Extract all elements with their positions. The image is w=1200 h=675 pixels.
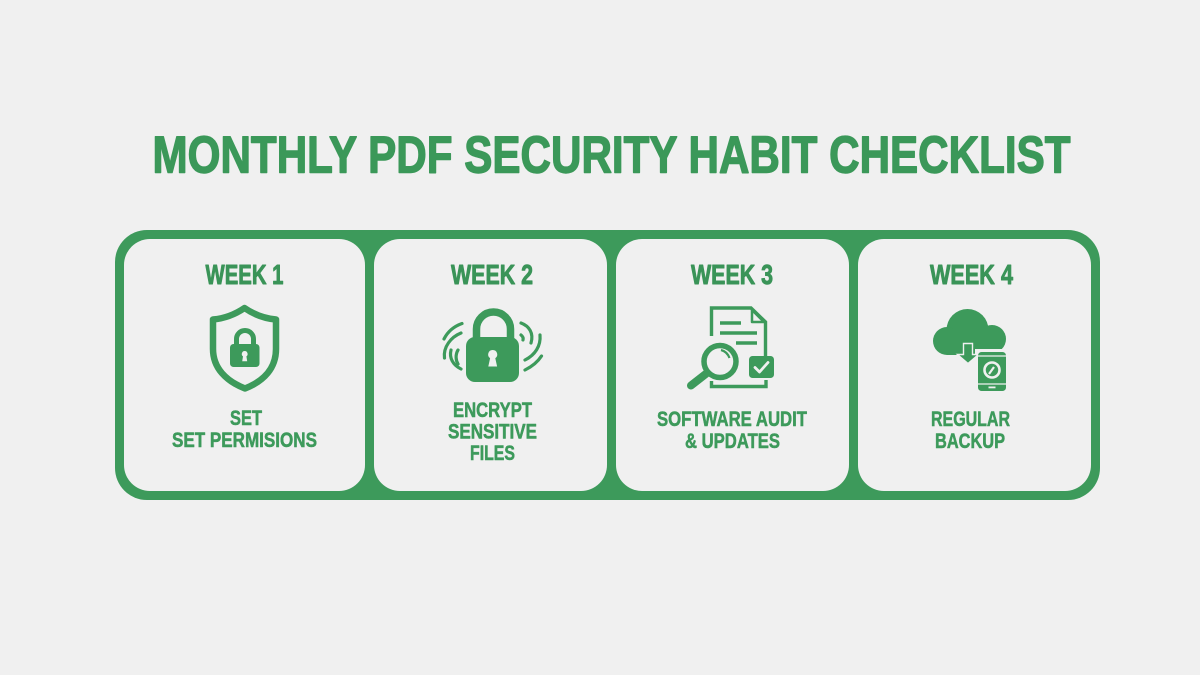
panel: week 1 [124, 239, 365, 491]
label: software audit and updates [657, 408, 807, 453]
panel: week 3 [616, 239, 849, 491]
icon: cloud backup to phone [933, 309, 1008, 393]
label: software audit and updates: SOFTWARE AUDIT [657, 408, 807, 431]
icon: padlock with vibration waves [444, 312, 542, 382]
heading: week 2: WEEK 2 [451, 259, 533, 290]
label: regular backup [931, 408, 1010, 453]
heading: week 1: WEEK 1 [206, 259, 284, 290]
heading: week 3: WEEK 3 [691, 259, 773, 290]
label: set permissions: SET PERMISIONS [172, 429, 317, 452]
heading: week 4: WEEK 4 [930, 259, 1014, 290]
label: regular backup: REGULAR [931, 408, 1010, 431]
panel: week 4 [858, 239, 1091, 491]
label: set permissions [172, 407, 317, 452]
checklist frame [115, 230, 1100, 500]
icon: document with magnifier and check [691, 308, 774, 386]
icon: shield with padlock [213, 308, 276, 388]
label: encrypt sensitive files: FILES [470, 442, 515, 465]
label: encrypt sensitive files: SENSITIVE [448, 420, 537, 444]
panel: week 2 [374, 239, 607, 491]
label: encrypt sensitive files: ENCRYPT [453, 399, 532, 422]
label: regular backup: BACKUP [935, 430, 1005, 453]
label: set permissions: SET [230, 407, 262, 430]
label: encrypt sensitive files [448, 399, 537, 465]
label: software audit and updates: & UPDATES [685, 430, 780, 453]
